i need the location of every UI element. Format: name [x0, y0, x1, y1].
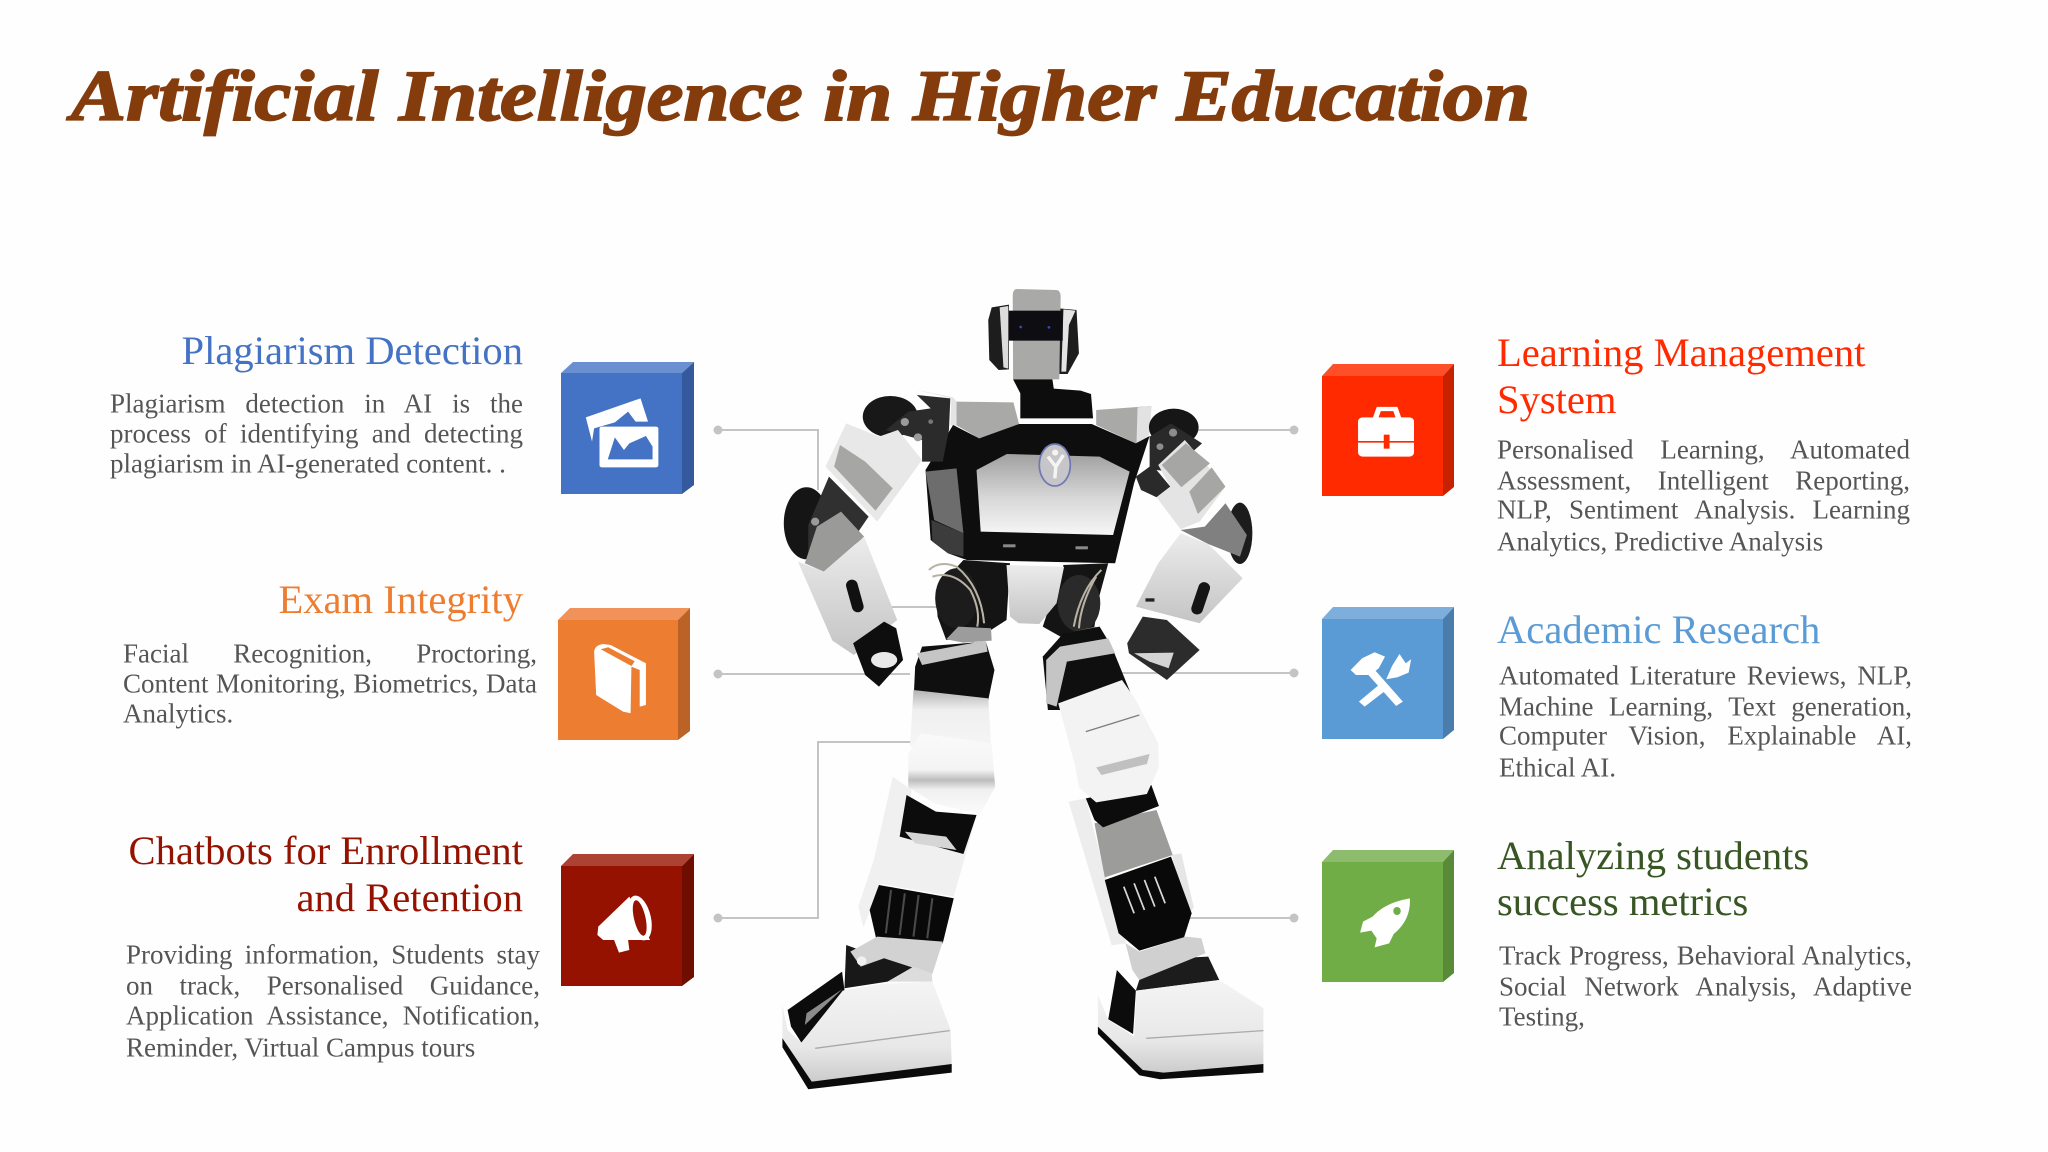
text: chatbots description: Providing information, Students stay	[126, 940, 540, 970]
icon: rocket	[1360, 898, 1410, 947]
text: plagiarism description: Plagiarism detection in AI is the	[110, 388, 523, 418]
icon cube: dark red megaphone	[561, 854, 694, 986]
icon cube: green rocket	[1322, 850, 1454, 982]
text: LMS description: Analytics, Predictive Analysis	[1497, 526, 1823, 556]
text: chatbots description: on track, Personalised Guidance,	[126, 970, 540, 1000]
heading: Chatbots for Enrollment and Retention	[129, 828, 523, 920]
robot right foot	[1098, 970, 1263, 1079]
text: chatbots description: Application Assistance, Notification,	[126, 1000, 540, 1030]
connector lines	[714, 426, 1298, 922]
icon cube: red briefcase	[1322, 364, 1454, 496]
heading: Analyzing students success metrics	[1497, 833, 1809, 924]
heading: Analyzing students success metrics: Analyzing students	[1497, 833, 1809, 878]
text: LMS description: NLP, Sentiment Analysis. Learning	[1497, 494, 1910, 524]
text: chatbots description	[126, 940, 540, 1062]
text: LMS description: Personalised Learning, Automated	[1497, 434, 1910, 464]
heading: Learning Management System: Learning Management	[1497, 330, 1865, 375]
text: exam integrity description: Facial Recognition, Proctoring,	[123, 638, 537, 668]
text: research description	[1499, 660, 1912, 782]
icon: megaphone	[597, 894, 656, 953]
icon cube: orange book	[558, 608, 690, 740]
robot right arm	[1127, 409, 1252, 680]
robot head	[988, 289, 1079, 379]
heading: Chatbots for Enrollment and Retention: Chatbots for Enrollment	[129, 828, 523, 873]
icon: pictures	[586, 398, 658, 467]
robot upper thighs	[913, 627, 1138, 710]
text: LMS description: Assessment, Intelligent Reporting,	[1497, 466, 1910, 496]
icon: briefcase	[1358, 409, 1414, 457]
text: plagiarism description: plagiarism in AI-generated content. .	[110, 448, 506, 478]
text: metrics description	[1499, 940, 1912, 1032]
text: metrics description: Social Network Analysis, Adaptive	[1499, 972, 1912, 1002]
text: exam integrity description: Analytics.	[123, 698, 233, 728]
heading: Chatbots for Enrollment and Retention: and Retention	[296, 875, 523, 920]
heading: Academic Research: Academic Research	[1497, 607, 1820, 652]
icon cube: blue picture	[561, 362, 694, 494]
title: Artificial Intelligence in Higher Education	[66, 56, 1530, 136]
text: exam integrity description	[123, 638, 537, 728]
text: research description: Machine Learning, Text generation,	[1499, 692, 1912, 722]
text: research description: Computer Vision, Explainable AI,	[1499, 720, 1912, 750]
text: plagiarism description: process of identifying and detecting	[110, 418, 523, 448]
text: metrics description: Testing,	[1499, 1002, 1585, 1032]
robot left foot	[782, 972, 952, 1089]
icon: hammer and wrench	[1351, 652, 1411, 707]
icon cube: blue tools	[1322, 607, 1454, 739]
icon: book	[594, 644, 646, 713]
robot legs and feet	[782, 680, 1263, 1089]
robot right leg	[1058, 680, 1219, 991]
heading: Analyzing students success metrics: success metrics	[1497, 879, 1748, 924]
robot shoulders	[914, 389, 1152, 443]
heading: Exam Integrity: Exam Integrity	[278, 577, 523, 622]
text: chatbots description: Reminder, Virtual Campus tours	[126, 1032, 475, 1062]
heading: Learning Management System	[1497, 330, 1866, 422]
text: research description: Ethical AI.	[1499, 752, 1616, 782]
robot neck	[1013, 379, 1093, 418]
robot	[782, 289, 1263, 1089]
robot hips	[929, 560, 1108, 647]
text: plagiarism description	[110, 388, 523, 478]
heading: Learning Management System: System	[1497, 377, 1616, 422]
text: LMS description	[1497, 434, 1910, 556]
text: exam integrity description: Content Monitoring, Biometrics, Data	[123, 668, 537, 698]
heading: Plagiarism Detection: Plagiarism Detection	[182, 328, 523, 373]
text: metrics description: Track Progress, Behavioral Analytics,	[1499, 940, 1912, 970]
robot left arm	[784, 395, 950, 687]
robot upper body	[784, 289, 1252, 710]
robot torso	[926, 424, 1150, 563]
robot left leg	[844, 690, 995, 988]
text: research description: Automated Literature Reviews, NLP,	[1499, 660, 1912, 690]
